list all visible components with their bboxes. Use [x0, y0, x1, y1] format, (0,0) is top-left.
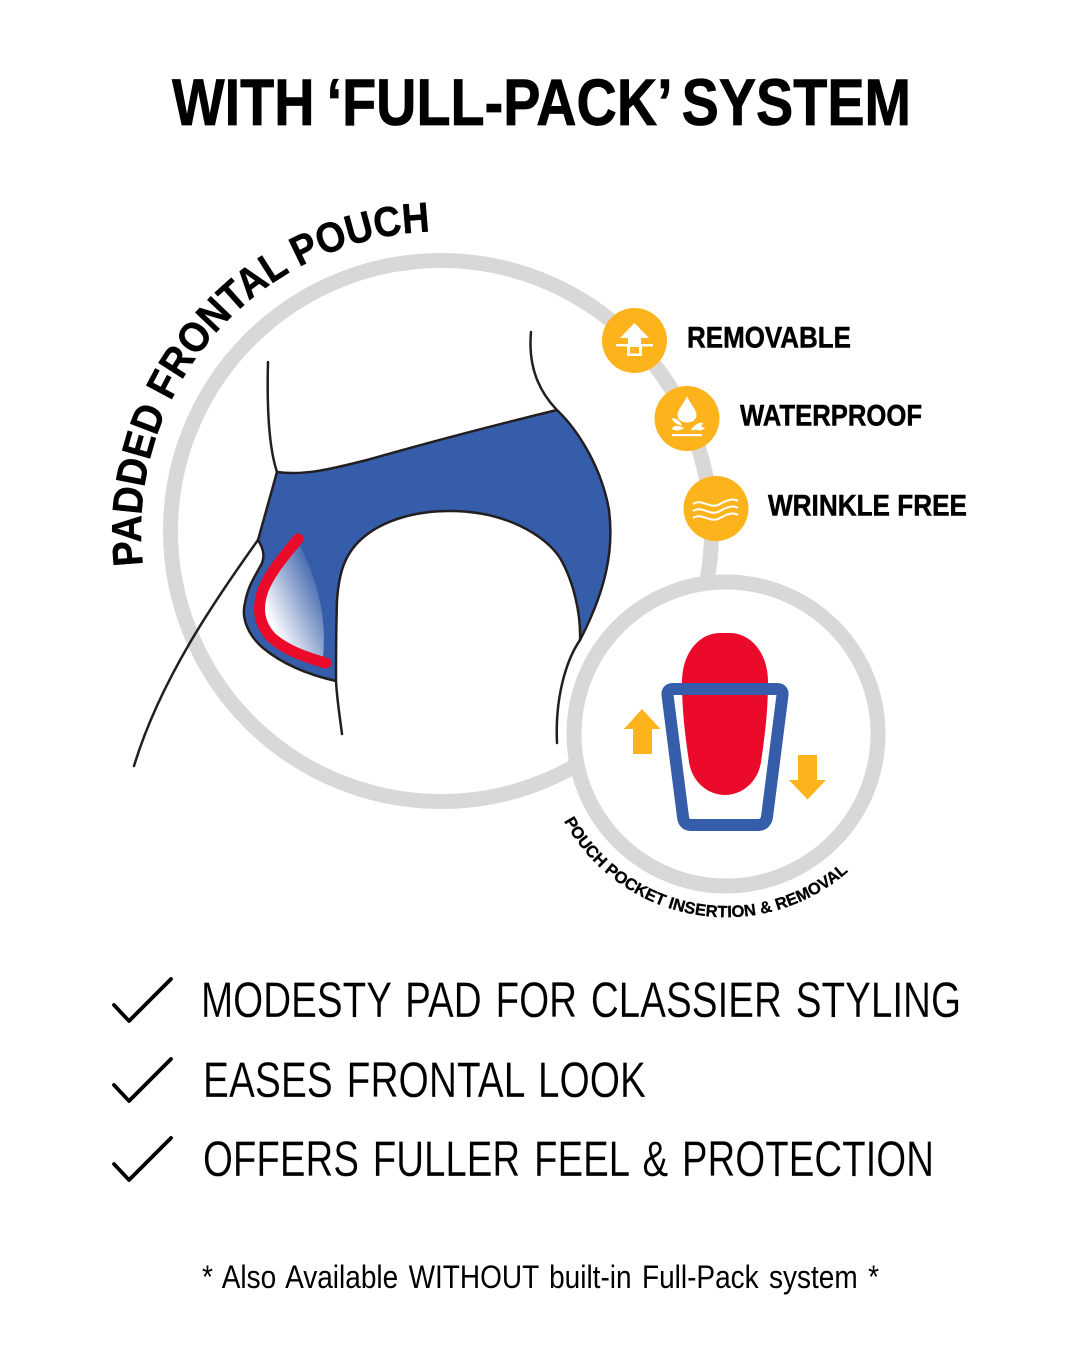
feature icon: wrinkle free [684, 476, 748, 541]
label: removable: REMOVABLE [687, 322, 851, 354]
feature icon: removable [602, 308, 667, 373]
body outline: waist front [268, 362, 277, 472]
body outline: waist back [530, 332, 556, 409]
check mark 1 [114, 979, 171, 1021]
label: wrinkle free: WRINKLE FREE [768, 490, 967, 522]
title: WITH ‘FULL-PACK’ SYSTEM [172, 65, 911, 139]
body outline: inner thigh [336, 681, 342, 734]
item 2: EASES FRONTAL LOOK [203, 1052, 646, 1108]
small inset ring [574, 582, 878, 886]
curved heading: padded frontal pouch: PADDED FRONTAL POUCH [112, 202, 428, 566]
red pouch line [260, 539, 326, 663]
body outline: front leg [134, 540, 258, 766]
footnote: * Also Available WITHOUT built-in Full-Pack system * [202, 1259, 879, 1295]
blue pocket [667, 689, 783, 825]
padding gradient [264, 546, 324, 657]
garment illustration [134, 332, 610, 766]
label: waterproof: WATERPROOF [740, 400, 922, 432]
check mark 3 [114, 1138, 171, 1180]
up arrow [624, 709, 660, 754]
pouch insertion diagram [624, 633, 826, 825]
checklist [114, 972, 961, 1187]
down arrow [789, 755, 826, 800]
curved caption: pouch pocket insertion and removal: POUCH POCKET INSERTION & REMOVAL [564, 816, 848, 918]
check mark 2 [114, 1059, 171, 1101]
red insert [682, 633, 768, 795]
brief shape [244, 410, 610, 681]
feature icon: waterproof [654, 386, 720, 451]
body outline: back leg [557, 640, 580, 743]
large grey ring [170, 260, 712, 802]
